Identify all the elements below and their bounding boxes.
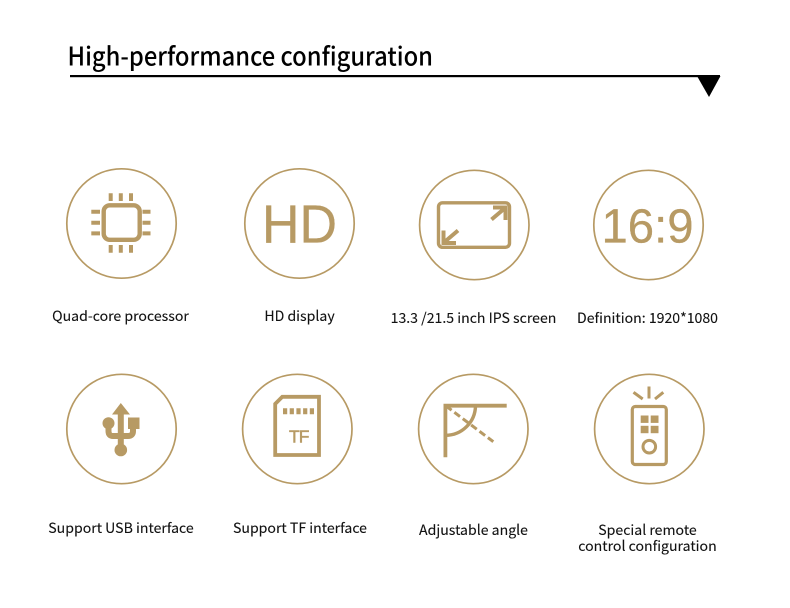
feature: HD display <box>245 169 354 326</box>
label: HD display <box>264 306 335 326</box>
label <box>578 520 717 556</box>
icon: TF card <box>275 397 319 455</box>
icon: TF card: TF <box>289 426 309 446</box>
label: Support TF interface <box>233 518 367 538</box>
feature: USB interface <box>48 374 194 538</box>
heading <box>68 36 720 97</box>
feature: 16:9 definition <box>577 170 718 328</box>
heading rule with triangle marker <box>70 75 720 97</box>
feature: IPS screen <box>391 170 556 328</box>
label: Quad-core processor <box>52 306 189 326</box>
label: Adjustable angle <box>419 520 528 540</box>
feature: adjustable angle <box>419 374 528 540</box>
feature: TF interface <box>233 374 367 538</box>
feature: remote control <box>578 374 717 556</box>
title: High-performance configuration <box>68 36 433 74</box>
icon: remote <box>632 386 666 464</box>
label: Special remote <box>598 520 697 540</box>
feature: quad-core processor <box>52 169 189 326</box>
label: Definition: 1920*1080 <box>577 308 718 328</box>
icon: screen with diagonal arrows <box>438 203 510 247</box>
icon: 16:9: 16:9 <box>602 200 694 253</box>
icon: angle <box>445 406 507 457</box>
label: control configuration <box>578 536 717 556</box>
icon: HD: HD <box>262 194 337 254</box>
icon: chip <box>91 193 150 253</box>
label: 13.3 /21.5 inch IPS screen <box>391 308 556 328</box>
icon: USB <box>102 403 140 456</box>
label: Support USB interface <box>48 518 194 538</box>
